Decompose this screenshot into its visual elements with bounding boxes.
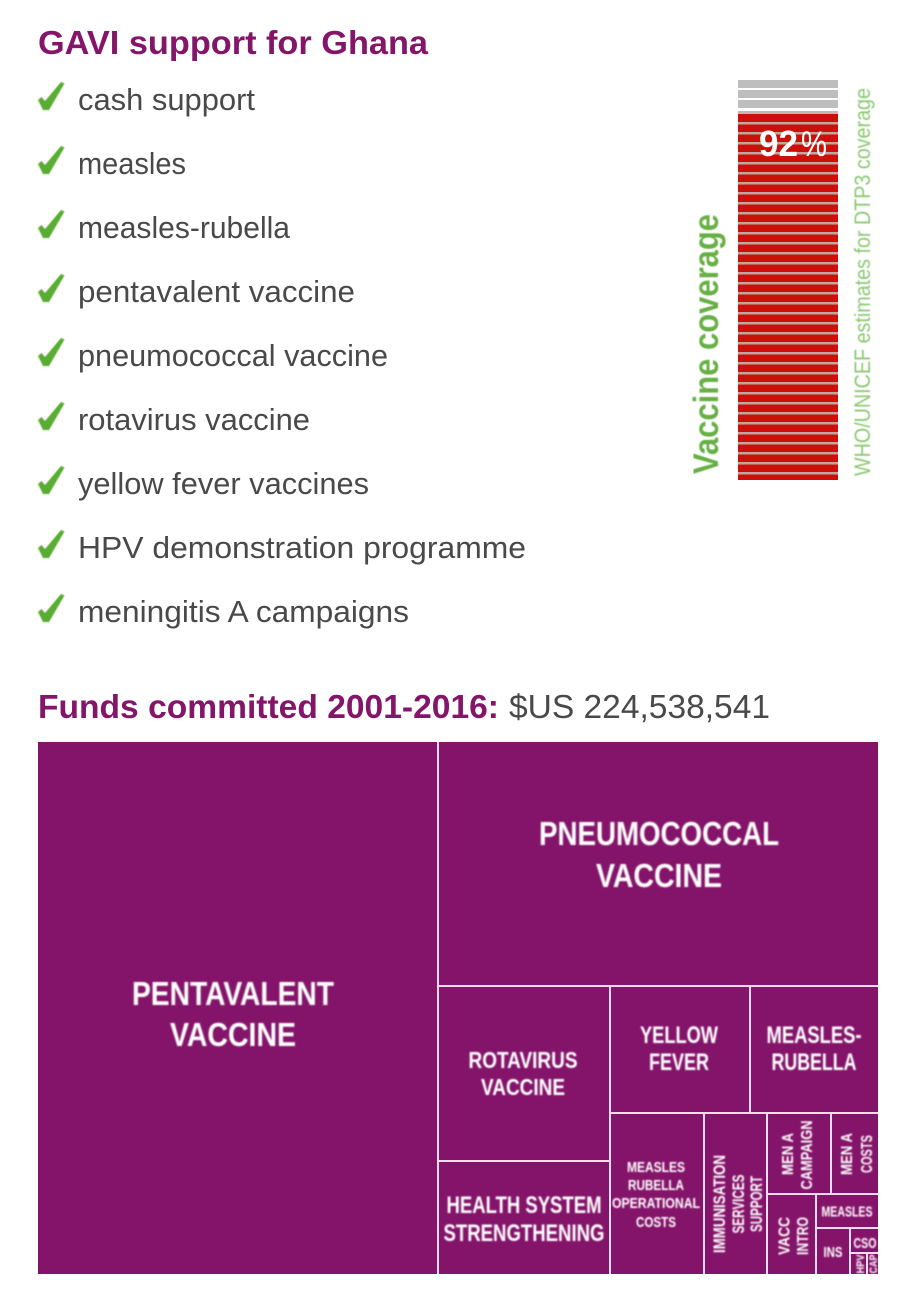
treemap: funds by category: CAMPAIGN bbox=[799, 1120, 816, 1190]
coverage value: % bbox=[801, 125, 827, 164]
item: measles-rubella: measles-rubella bbox=[78, 210, 291, 245]
label: measles-rubella: MEASLES- bbox=[766, 1022, 862, 1049]
label: health system strengthening: HEALTH SYSTEM bbox=[446, 1192, 602, 1219]
item: meningitis A campaigns: meningitis A campaigns bbox=[78, 594, 409, 629]
treemap: funds by category: SUPPORT bbox=[747, 1176, 766, 1232]
treemap: funds by category: STRENGTHENING bbox=[444, 1220, 604, 1247]
treemap: funds by category: FEVER bbox=[649, 1049, 709, 1076]
treemap: funds by category: SERVICES bbox=[729, 1174, 748, 1234]
treemap: funds by category: CAP bbox=[868, 1254, 880, 1274]
checklist: GAVI support items bbox=[38, 82, 526, 629]
treemap: funds by category: OPERATIONAL bbox=[612, 1195, 700, 1212]
item: measles bbox=[38, 146, 186, 181]
label: rotavirus vaccine: ROTAVIRUS bbox=[468, 1047, 578, 1073]
item: measles: measles bbox=[78, 146, 186, 181]
treemap: funds by category: VACCINE bbox=[596, 857, 722, 894]
item: rotavirus vaccine: rotavirus vaccine bbox=[78, 402, 310, 437]
label: vacc intro: VACC bbox=[776, 1217, 794, 1255]
coverage value bbox=[759, 123, 827, 164]
label: measles: MEASLES bbox=[822, 1204, 872, 1220]
treemap: funds by category: COSTS bbox=[636, 1214, 676, 1231]
item: pneumococcal vaccine: pneumococcal vaccine bbox=[78, 338, 388, 373]
label: pentavalent vaccine: PENTAVALENT bbox=[132, 975, 334, 1012]
treemap: funds by category: RUBELLA bbox=[628, 1177, 684, 1194]
label: yellow fever: YELLOW bbox=[640, 1022, 718, 1049]
label: immunisation services support: IMMUNISATION bbox=[710, 1155, 729, 1253]
title: GAVI support for Ghana bbox=[38, 24, 429, 61]
vaccine coverage axis label: Vaccine coverage bbox=[687, 214, 726, 474]
item: pentavalent vaccine: pentavalent vaccine bbox=[78, 274, 355, 309]
funds heading: $US 224,538,541 bbox=[509, 688, 770, 725]
treemap: funds by category: COSTS bbox=[859, 1135, 876, 1173]
treemap: funds by category bbox=[38, 742, 880, 1274]
funds heading bbox=[38, 688, 770, 725]
treemap: funds by category: VACCINE bbox=[481, 1074, 565, 1100]
coverage value: 92 bbox=[759, 123, 798, 164]
treemap: funds by category: INTRO bbox=[795, 1217, 812, 1255]
coverage bar chart bbox=[738, 80, 838, 480]
label: measles rubella operational costs: MEASLES bbox=[627, 1159, 685, 1176]
label: cso: CSO bbox=[854, 1235, 877, 1252]
item: cash support: cash support bbox=[78, 82, 255, 117]
label: men a costs: MEN A bbox=[839, 1133, 856, 1175]
label: ins: INS bbox=[824, 1244, 842, 1261]
label: men a campaign: MEN A bbox=[780, 1133, 797, 1175]
funds heading: Funds committed 2001-2016: bbox=[38, 688, 499, 725]
item: HPV demonstration programme: HPV demonstration programme bbox=[78, 530, 526, 565]
treemap: funds by category: RUBELLA bbox=[772, 1049, 856, 1076]
source note: WHO/UNICEF estimates for DTP3 coverage bbox=[850, 88, 875, 476]
treemap: funds by category: VACCINE bbox=[170, 1016, 296, 1053]
label: pneumococcal vaccine: PNEUMOCOCCAL bbox=[539, 815, 779, 852]
item: yellow fever vaccines: yellow fever vaccines bbox=[78, 466, 369, 501]
label: small cells: HPV bbox=[855, 1254, 867, 1274]
